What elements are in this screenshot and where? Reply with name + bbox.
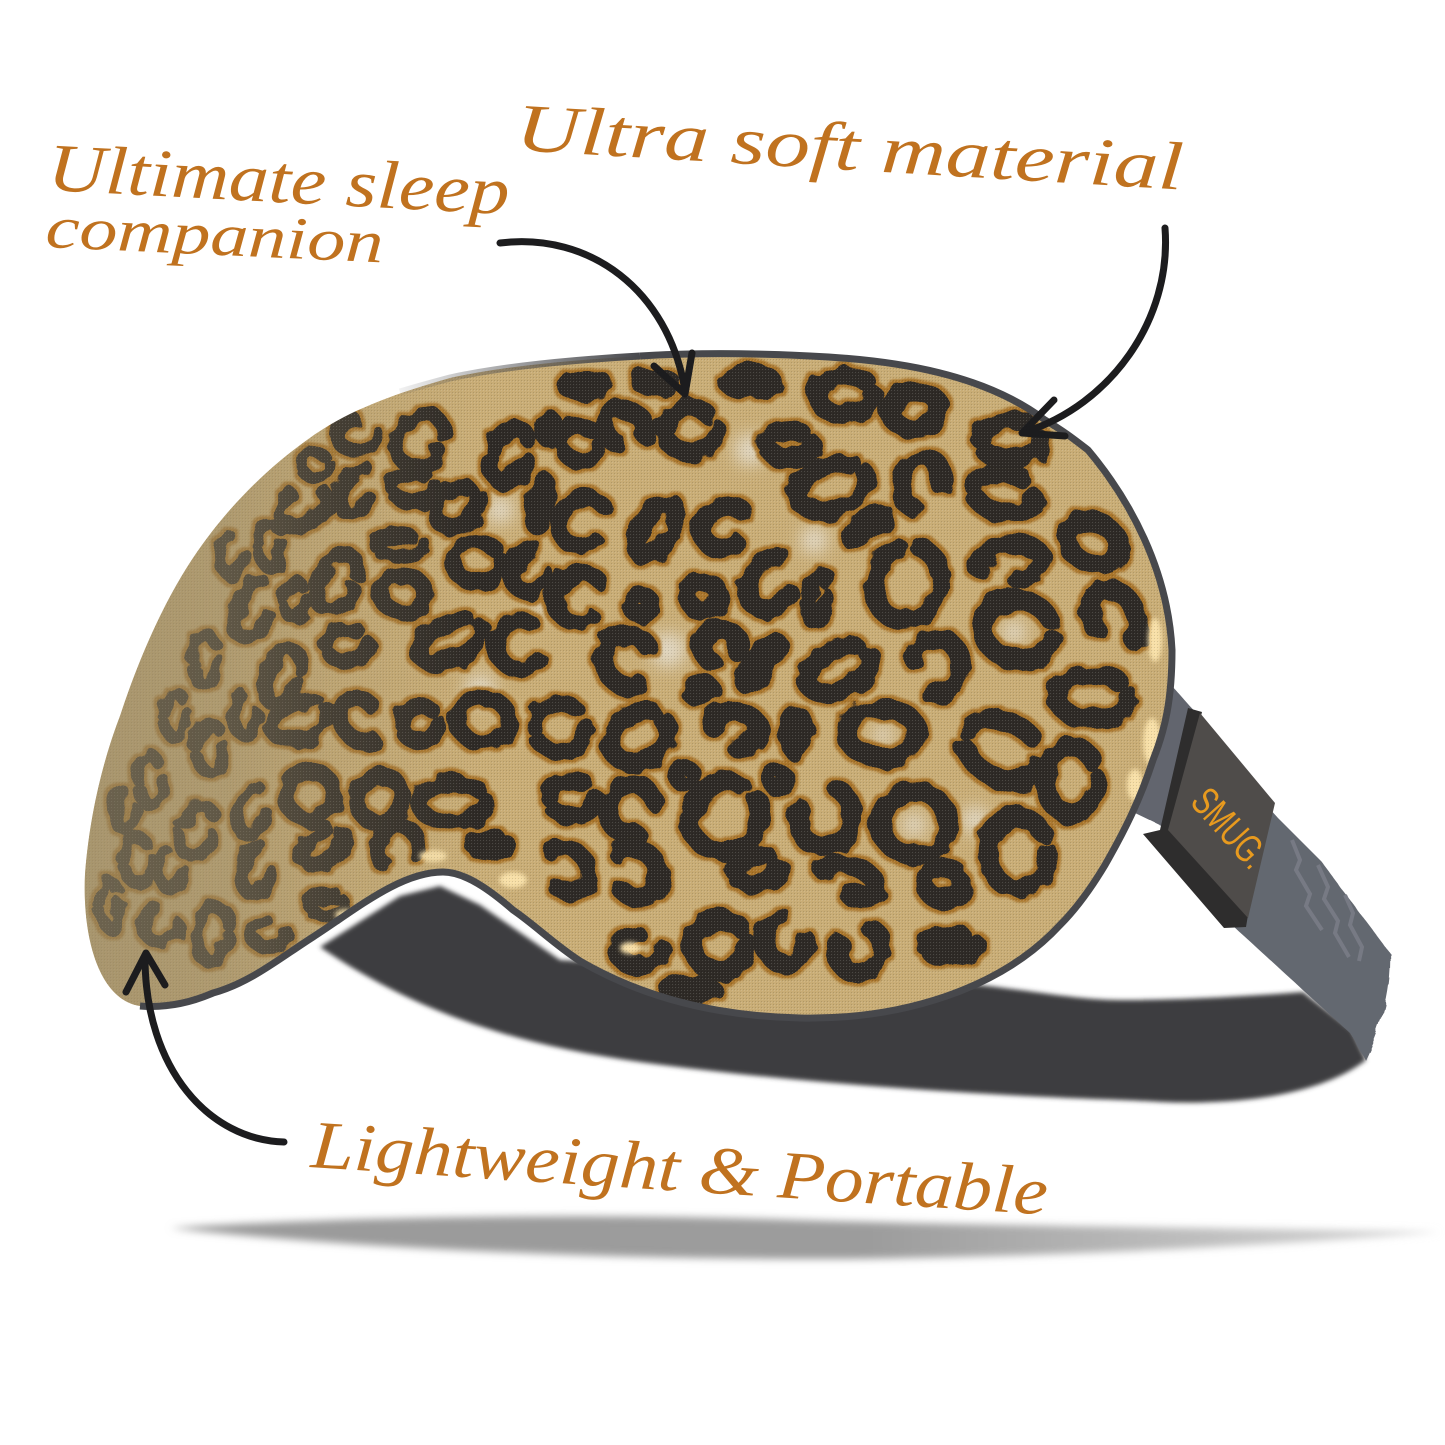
ground shadow: [170, 1216, 1440, 1259]
label: ultimate sleep companion: companion: [44, 194, 385, 275]
brand tab: [1143, 708, 1277, 928]
arrow: to material: [1022, 228, 1166, 436]
label: ultimate sleep companion: [44, 129, 512, 275]
side strap: [1135, 687, 1390, 1060]
arrow: to lower left of mask: [126, 953, 284, 1142]
brand label: SMUG.: [1182, 780, 1277, 877]
back strap: [320, 886, 1366, 1103]
label: ultra soft material: Ultra soft material: [514, 89, 1185, 205]
leopard print: [100, 374, 1148, 996]
label: ultimate sleep companion: Ultimate sleep: [46, 129, 512, 229]
label: lightweight and portable: Lightweight & Portable: [308, 1106, 1050, 1230]
mask piping: [140, 354, 1172, 1018]
sleep mask: [60, 340, 1190, 1040]
arrow: to top of mask: [500, 242, 692, 394]
